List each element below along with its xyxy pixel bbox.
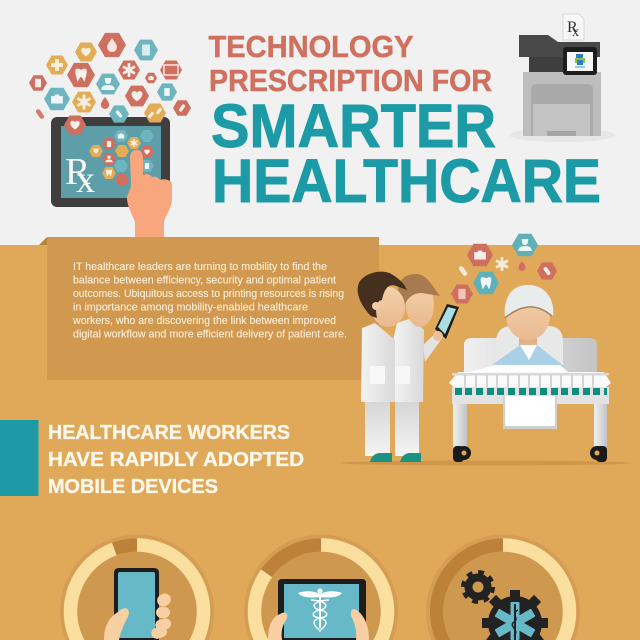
panel: intro — [39, 237, 379, 380]
bed rail — [452, 373, 609, 404]
bed legs and wheels — [453, 400, 607, 462]
Rx symbol: R — [65, 151, 91, 193]
phone in hand — [433, 304, 459, 341]
intro text: outcomes. Ubiquitous access to printing resources is rising — [73, 288, 344, 300]
bed chart card — [503, 396, 557, 429]
icon: hexagons overlapping tablet top edge — [64, 103, 166, 135]
intro text: balance between efficiency, security and optimal patient — [73, 274, 336, 286]
icon: Rx prescription paper: R — [567, 19, 578, 36]
intro text — [72, 261, 347, 340]
chart: gears donut — [426, 534, 580, 640]
title: SMARTER — [211, 92, 496, 160]
illustration: doctors — [358, 272, 459, 462]
icon: small gear — [464, 572, 492, 602]
icon: hexagons on tablet screen — [89, 130, 154, 186]
icon: tablet with Rx — [51, 117, 170, 207]
illustration: patient in bed — [449, 285, 611, 462]
icon: medical hexagons above patient — [451, 234, 557, 304]
chart: smartphone donut — [60, 534, 214, 640]
section heading: MOBILE DEVICES — [48, 475, 218, 498]
first doctor — [358, 272, 407, 462]
Rx symbol: x — [76, 159, 95, 201]
icon: hand holding smartphone — [104, 568, 173, 640]
icon: hands holding tablet with caduceus — [268, 579, 369, 640]
title: PRESCRIPTION FOR — [209, 63, 492, 98]
star of life — [495, 602, 535, 640]
icon: Rx prescription paper — [563, 14, 584, 40]
icon: Rx prescription paper: x — [572, 25, 579, 40]
title — [208, 29, 601, 215]
icon: floating medical hexagon cluster — [29, 33, 191, 120]
intro text: workers, who are discovering the link between improved — [72, 315, 336, 327]
chart: tablet donut — [244, 534, 398, 640]
icon: pointing hand — [127, 150, 172, 238]
icon: printer — [509, 35, 615, 142]
intro text: in importance among mobility-enabled healthcare — [73, 302, 308, 314]
title: HEALTHCARE — [212, 147, 601, 215]
title: TECHNOLOGY — [208, 29, 414, 64]
intro text: IT healthcare leaders are turning to mobility to find the — [73, 261, 327, 273]
icon: large gear with star of life — [482, 590, 548, 640]
intro text: digital workflow and more efficient delivery of patient care. — [73, 328, 347, 340]
section heading: HEALTHCARE WORKERS — [48, 421, 290, 444]
heading accent block — [0, 420, 38, 496]
floor shadow — [340, 460, 630, 466]
orange lower section — [0, 245, 640, 640]
section heading: HAVE RAPIDLY ADOPTED — [48, 448, 304, 471]
section heading — [48, 421, 304, 498]
second doctor — [393, 274, 443, 462]
